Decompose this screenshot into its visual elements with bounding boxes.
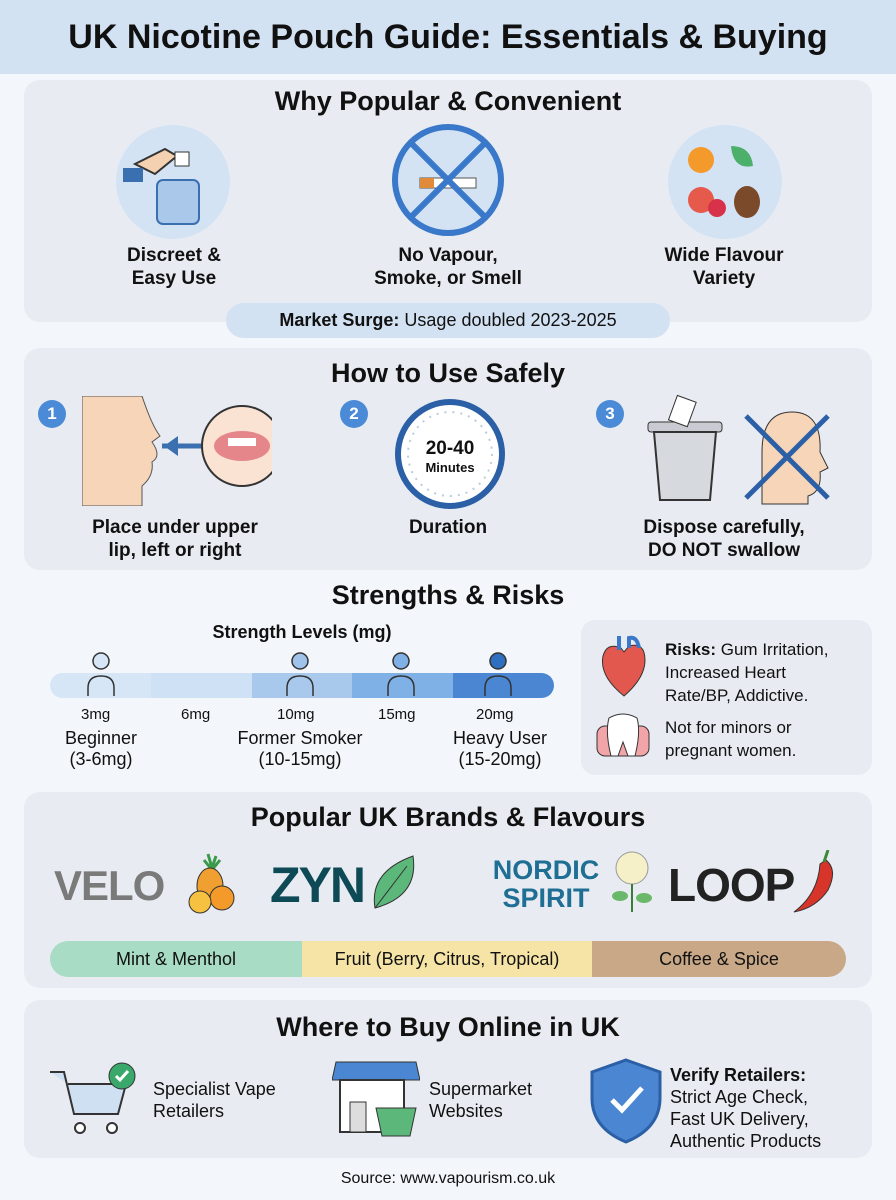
strength chart: (15-20mg) [458, 749, 542, 769]
label: discreet: Discreet & [127, 245, 221, 266]
heading: why popular: Why Popular & Convenient [275, 86, 621, 116]
panel: where to buy: Authentic Products [670, 1131, 821, 1151]
panel: where to buy: Verify Retailers: [670, 1065, 806, 1085]
logo: nordic spirit [493, 855, 599, 913]
label: step 3: DO NOT swallow [648, 540, 800, 561]
icon: chilli [794, 850, 834, 912]
title bar [0, 0, 896, 74]
step 2: 20-40 [426, 438, 474, 459]
strength chart: Former Smoker [237, 728, 362, 748]
label: step 1: lip, left or right [108, 540, 242, 561]
strength chart: (10-15mg) [258, 749, 342, 769]
strength chart: 6mg [181, 706, 210, 723]
logo: loop: LOOP [668, 859, 794, 911]
step 2 [340, 399, 505, 509]
step 2: 2 [349, 404, 359, 423]
label: no vapour [374, 245, 522, 289]
strength chart: Strength Levels (mg) [212, 622, 392, 642]
logo: nordic spirit: SPIRIT [502, 883, 590, 913]
panel: where to buy [24, 1000, 872, 1158]
step 3: 3 [605, 404, 615, 423]
strength chart: 20mg [476, 706, 514, 723]
label: step 3 [643, 517, 805, 561]
title bar: UK Nicotine Pouch Guide: Essentials & Buying [68, 18, 828, 56]
panel: risks [581, 620, 872, 775]
label: flavour: Variety [693, 268, 755, 289]
icon: flavours [668, 125, 782, 239]
icon: hand with pouch [116, 125, 230, 239]
source: Source: www.vapourism.co.uk [341, 1170, 555, 1187]
panel: risks: Risks: Gum Irritation, Increased Heart Rate/BP, Addictive. [665, 640, 828, 705]
label: step 1 [92, 517, 258, 561]
logo: velo: VELO [54, 862, 164, 909]
label: no vapour: Smoke, or Smell [374, 268, 522, 289]
callout: market surge [226, 303, 670, 338]
heading: strengths & risks: Strengths & Risks [332, 580, 564, 610]
panel: where to buy: Specialist Vape [153, 1079, 276, 1099]
flavour bar: Fruit (Berry, Citrus, Tropical) [335, 949, 559, 969]
heading: brands: Popular UK Brands & Flavours [251, 802, 645, 832]
label: no vapour: No Vapour, [398, 245, 498, 266]
flavour bar [50, 941, 846, 977]
panel: risks: Not for minors or pregnant women. [665, 718, 796, 760]
strength chart: 3mg [81, 706, 110, 723]
panel: where to buy: Supermarket [429, 1079, 532, 1099]
step 1: 1 [47, 404, 57, 423]
step 1 [38, 396, 272, 506]
panel: how to use [24, 348, 872, 570]
icon: heart [602, 636, 646, 697]
strength chart [50, 622, 554, 769]
label: discreet [127, 245, 221, 289]
flavour bar: Mint & Menthol [116, 949, 236, 969]
icon: leaf [374, 855, 414, 909]
label: duration: Duration [409, 517, 487, 538]
label: step 1: Place under upper [92, 517, 258, 538]
strength chart: 15mg [378, 706, 416, 723]
panel: where to buy: Strict Age Check, [670, 1087, 808, 1107]
panel: brands [24, 792, 872, 988]
strength chart: 10mg [277, 706, 315, 723]
label: discreet: Easy Use [132, 268, 216, 289]
icon: cart [50, 1062, 136, 1134]
step 2: Minutes [425, 460, 475, 475]
icon: elderflower [612, 852, 652, 912]
icon: tooth [596, 714, 650, 756]
panel: why popular [24, 80, 872, 322]
strength chart: (3-6mg) [69, 749, 132, 769]
heading: how to use: How to Use Safely [331, 358, 565, 388]
label: step 3: Dispose carefully, [643, 517, 805, 538]
icon: no smoke [392, 124, 504, 236]
panel: where to buy: Retailers [153, 1101, 224, 1121]
callout: market surge: Market Surge: Usage doubled 2023-2025 [279, 310, 617, 330]
label: flavour [664, 245, 784, 289]
logo: zyn: ZYN [270, 857, 364, 913]
panel: where to buy: Websites [429, 1101, 503, 1121]
strength chart: Heavy User [453, 728, 547, 748]
icon: supermarket [332, 1062, 420, 1136]
flavour bar: Coffee & Spice [659, 949, 779, 969]
icon: shield [590, 1058, 662, 1144]
logo: nordic spirit: NORDIC [493, 855, 599, 885]
step 3 [596, 394, 830, 504]
icon: pineapple orange [188, 854, 234, 914]
panel: where to buy: Fast UK Delivery, [670, 1109, 809, 1129]
strength chart: Beginner [65, 728, 137, 748]
heading: where to buy: Where to Buy Online in UK [276, 1012, 620, 1042]
label: flavour: Wide Flavour [664, 245, 784, 266]
